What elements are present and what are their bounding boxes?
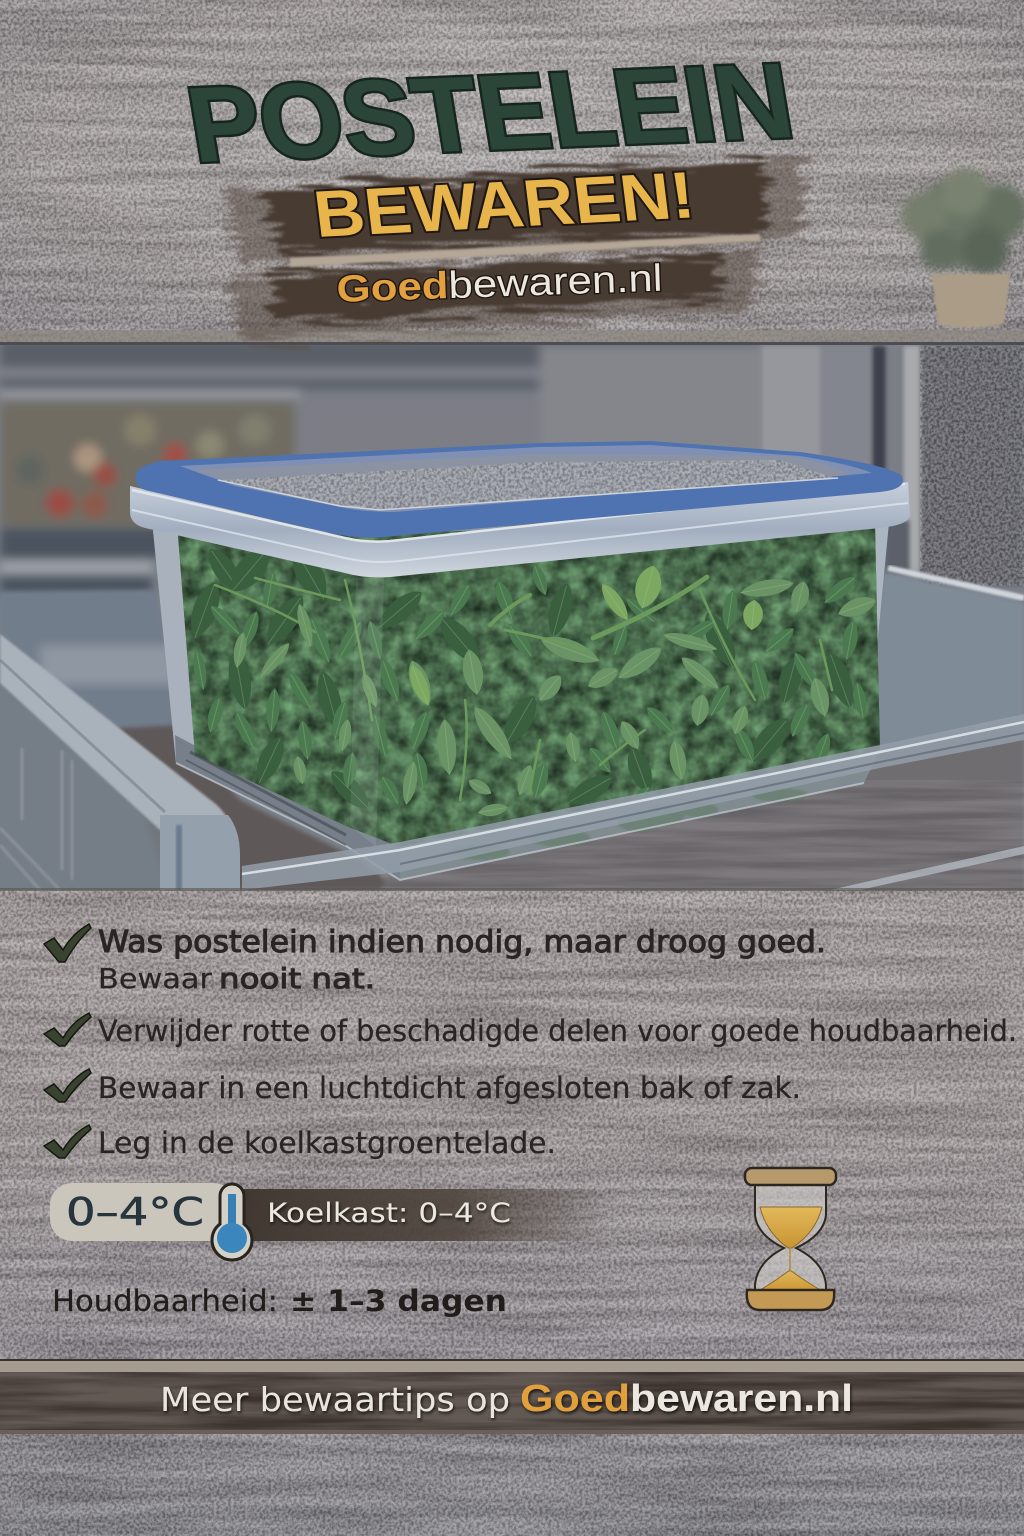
- blurred food container in the background: [0, 402, 295, 594]
- temperature pill: [50, 1183, 235, 1241]
- icon: check mark: [44, 1069, 91, 1102]
- icon: hourglass: [745, 1168, 836, 1310]
- brand: Goedbewaren.nl: Goed: [336, 265, 449, 311]
- reflected leaves in the box bottom: [450, 788, 808, 860]
- icon: check mark: [44, 1125, 91, 1158]
- panel: fridge photo: [0, 340, 1024, 890]
- item 1: Bewaar: [98, 962, 213, 995]
- panel: top header background: [0, 0, 1024, 346]
- food box with leaves: [130, 441, 910, 880]
- brown strip: [225, 1189, 610, 1241]
- leaves: bright: [405, 563, 764, 708]
- item 3: Bewaar in een luchtdicht afgesloten bak of zak.: [98, 1071, 801, 1105]
- item 1: Was postelein indien nodig, maar droog goed.: [98, 925, 826, 960]
- vertical fridge wall strips: [762, 346, 1024, 586]
- footer text: Meer bewaartips op: [160, 1380, 510, 1419]
- left drawer wall: [0, 634, 240, 890]
- icon: check mark: [44, 1013, 91, 1046]
- footer band: [0, 1359, 1024, 1434]
- checklist: [44, 924, 1017, 1160]
- item 2: Verwijder rotte of beschadigde delen voor goede houdbaarheid.: [98, 1014, 1017, 1048]
- back wall: [0, 345, 758, 448]
- fridge temperature label: Koelkast: 0–4°C: [267, 1198, 511, 1229]
- leaves: light: [231, 576, 879, 818]
- item 4: Leg in de koelkastgroentelade.: [98, 1126, 556, 1160]
- front drawer edge: [242, 714, 1024, 890]
- shelf life text: Houdbaarheid:: [52, 1284, 278, 1318]
- heading: BEWAREN!: BEWAREN!: [310, 158, 698, 252]
- icon: check mark: [44, 924, 91, 962]
- temperature row: [50, 1183, 610, 1260]
- box body: [153, 526, 888, 762]
- brand: Goedbewaren.nl: [336, 258, 663, 311]
- icon: thermometer: [212, 1184, 252, 1260]
- item 1: [44, 924, 826, 995]
- shelf with potted plant: [0, 168, 1024, 345]
- temperature value: 0–4°C: [66, 1190, 204, 1234]
- footer band: bewaren.nl: [630, 1378, 853, 1420]
- drawer floor and right wall: [0, 572, 1024, 890]
- brand: Goedbewaren.nl: bewaren.nl: [448, 258, 663, 307]
- footer band: Goed: [520, 1378, 630, 1420]
- heading: brown brush banner: [225, 156, 805, 342]
- title: POSTELEIN: POSTELEIN: [179, 41, 801, 185]
- shelf life text: [52, 1284, 507, 1318]
- shelf life text: ± 1–3 dagen: [290, 1284, 507, 1318]
- stems: [215, 577, 832, 800]
- box lid: [130, 441, 910, 577]
- panel: bottom info background: [0, 888, 1024, 1536]
- leaves: mid: [191, 563, 869, 817]
- item 1: nooit nat.: [219, 962, 375, 995]
- leaves: dark: [184, 540, 860, 816]
